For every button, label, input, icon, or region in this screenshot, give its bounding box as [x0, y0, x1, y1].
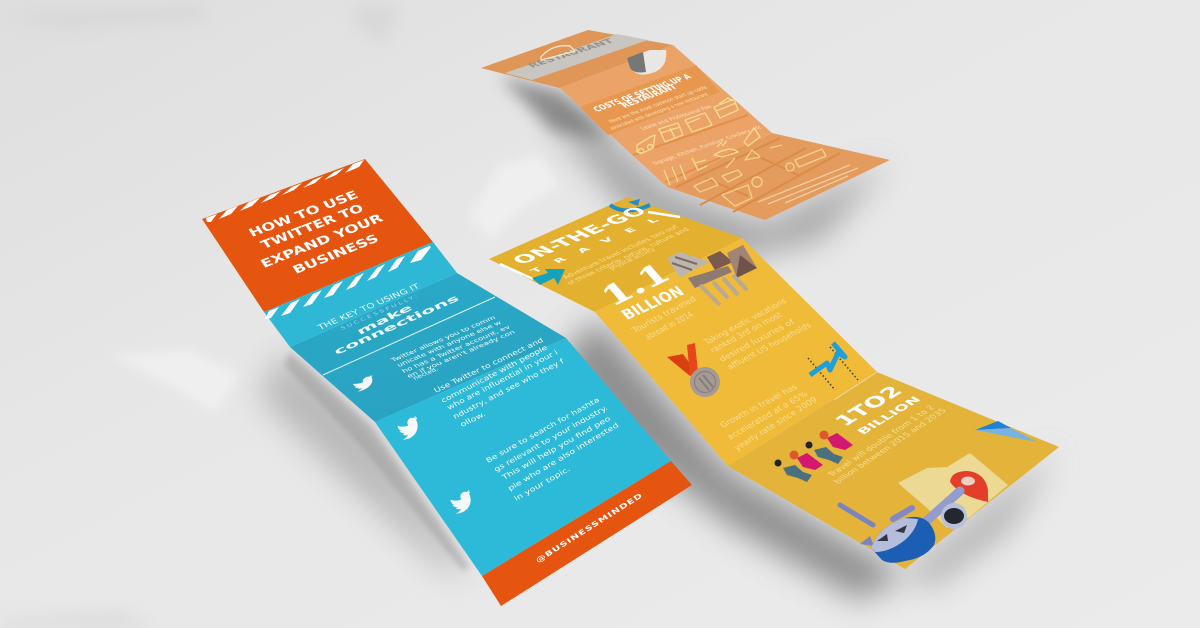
icon: airplane — [840, 491, 967, 563]
paragraph 1: Twitter allows you to comm — [388, 314, 497, 363]
icon: twitter bird 1 — [352, 374, 378, 393]
icons: budget grid — [694, 145, 826, 206]
text: tourists: Tourists traveled — [629, 295, 698, 335]
costs intro text — [607, 84, 710, 131]
icons: people — [774, 430, 853, 482]
text: growth: accelerated at a 65% — [725, 389, 810, 442]
paragraph 2: ndustry, and see who they f — [452, 357, 567, 421]
panel: light blue body — [375, 338, 671, 576]
panel: travel middle — [595, 238, 877, 466]
icon: location pin — [950, 471, 988, 502]
stat label: billion: BILLION — [618, 283, 688, 323]
brochure: travel — [489, 197, 1059, 569]
costs heading: RESTAURANT — [619, 82, 680, 109]
cover title: EXPAND YOUR — [258, 212, 386, 271]
dark costs band — [580, 65, 720, 135]
text: growth: yearly rate since 2009 — [732, 395, 819, 453]
icon: bronze medal — [667, 343, 720, 397]
signage label: Signage, Kitchen, Furniture, Crockery, etc — [651, 124, 764, 166]
icon: monuments — [667, 245, 757, 305]
icon: growth chart — [808, 343, 858, 390]
middle stripes — [265, 246, 431, 319]
dark divider bands — [633, 115, 770, 182]
divider line — [323, 297, 495, 375]
brochure: restaurant — [481, 30, 890, 220]
icons: signage row — [664, 128, 760, 185]
shadows under brochures — [258, 76, 1056, 600]
paragraph 1: unicate with anyone else w — [395, 319, 503, 368]
cover title: BUSINESS — [290, 232, 382, 277]
cover title: TWITTER TO — [258, 202, 366, 252]
panel: light blue header — [264, 242, 457, 347]
paragraph 3: ple who are also interested — [507, 422, 621, 493]
paragraph 1: en if you aren't already con — [405, 329, 517, 379]
top stripes — [206, 160, 364, 222]
paragraph 2: communicate with people — [440, 344, 549, 405]
text: tourists — [629, 295, 698, 342]
pie chart — [627, 50, 666, 75]
closing note lines — [758, 165, 858, 204]
icon: teal arrow — [532, 269, 565, 285]
paragraph 1: nected. — [411, 366, 440, 381]
costs intro text: associated with developing a new restaurant — [608, 91, 710, 131]
make connections heading: make — [354, 302, 415, 337]
icon: twitter bird 3 — [449, 489, 477, 515]
text: travel doubling: billion between 2015 and 2035 — [832, 407, 949, 485]
header text: THE KEY TO USING IT — [315, 282, 422, 332]
icons: lease row — [637, 98, 738, 154]
adventure intro text: Adventure travel includes two out — [560, 224, 681, 280]
title: on-the-go: ON-THE-GO — [508, 205, 652, 267]
panel: darker blue section — [290, 273, 566, 422]
paragraph 2 — [433, 337, 567, 429]
adventure intro text: physical activity — [606, 247, 658, 271]
panel: restaurant bottom — [667, 133, 890, 220]
panel: travel bottom — [728, 372, 1059, 569]
panel: orange cover — [202, 159, 433, 312]
paragraph 3 — [485, 396, 621, 503]
paragraph 3: in your topic. — [513, 465, 572, 503]
icon: folded map — [898, 453, 1008, 528]
text: travel doubling — [825, 404, 949, 485]
adventure intro text — [560, 224, 692, 286]
stat: 1.1: 1.1 — [594, 257, 677, 313]
icon: twitter bird 2 — [396, 415, 424, 441]
fold edge highlight — [834, 372, 877, 400]
restaurant heading: RESTAURANT — [525, 37, 617, 69]
header text: SUCCESSFULLY: — [340, 294, 418, 331]
lease label: Lease and Professional Fee — [639, 104, 714, 131]
text: exotic vacations: affluent US households — [725, 321, 813, 372]
brochure: twitter — [202, 159, 692, 606]
make connections heading — [331, 293, 461, 357]
paragraph 3: Be sure to search for hashta — [485, 396, 601, 465]
costs heading: COSTS OF SETTING UP A — [590, 72, 694, 113]
costs heading — [590, 72, 694, 113]
cover title: HOW TO USE — [246, 188, 361, 240]
subtitle: travel: TRAVEL — [528, 217, 661, 274]
icon: blue paper corner — [975, 421, 1037, 442]
grey heading band — [505, 34, 648, 80]
panel: restaurant middle — [560, 45, 772, 187]
text: tourists: abroad in 2014 — [643, 310, 695, 342]
budget grid lines — [676, 138, 840, 212]
paragraph 2: ollow. — [459, 411, 488, 429]
make connections heading: connections — [331, 293, 461, 357]
footer band — [482, 461, 692, 606]
costs intro text: Here are the most common start up costs — [607, 84, 709, 124]
paragraph 3: This will help you find peo — [500, 415, 612, 483]
paragraph 2: who are influential in your i — [446, 349, 560, 412]
text: exotic vacations — [702, 297, 813, 372]
paragraph 3: gs relevant to your industry. — [493, 404, 610, 474]
text: travel doubling: Travel will double from 1 to 2 — [825, 404, 937, 479]
icon: cloche — [541, 46, 575, 60]
white accent lines — [500, 212, 680, 279]
text: exotic vacations: ranked 3rd on most — [708, 310, 784, 355]
stat label: billion: BILLION — [855, 395, 924, 437]
text: exotic vacations: Taking exotic vacations — [702, 297, 789, 347]
panel: restaurant top — [481, 30, 673, 88]
cover title — [246, 188, 386, 277]
paragraph 2: Use Twitter to connect and — [433, 337, 545, 395]
adventure intro text: of three criteria: nature, culture and — [564, 227, 692, 286]
icon: arc and flag — [610, 199, 650, 210]
paragraph 1: ho has a Twitter account, ev — [400, 324, 512, 374]
panel: travel top — [489, 197, 742, 312]
stat: 1 to 2: 1TO2 — [830, 383, 908, 429]
text: growth: Growth in travel has — [718, 383, 799, 430]
text: exotic vacations: desired luxuries of — [717, 317, 797, 364]
text: growth — [718, 383, 819, 453]
footer handle: @BUSINESSMINDED — [534, 492, 644, 565]
